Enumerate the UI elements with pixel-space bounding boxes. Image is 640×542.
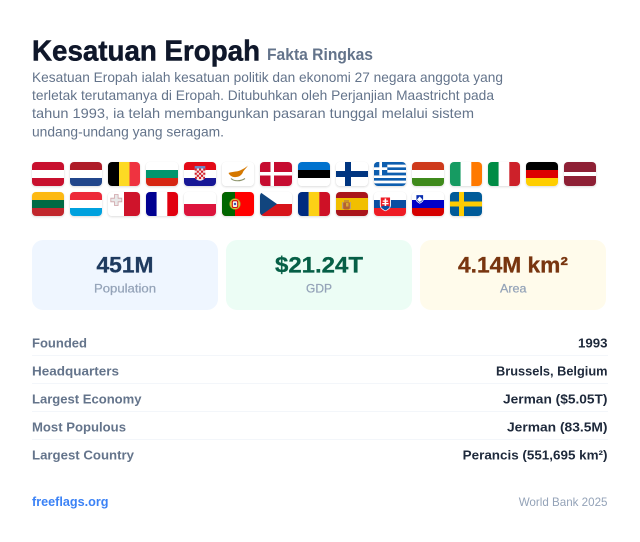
flag: Netherlands [68,162,104,188]
stat card: GDP: $21.24T [275,252,363,277]
flags grid [30,162,598,218]
row: headquarters [32,364,608,379]
description: undang-undang yang seragam. [32,124,224,139]
title: Kesatuan Eropah [32,36,260,68]
stat card: population: 451M [96,252,154,277]
flag: Latvia [562,162,598,188]
flag: Croatia [182,162,218,188]
flag: Malta [106,192,142,218]
flag: Spain [334,192,370,218]
row: headquarters: Headquarters [32,364,119,379]
flag: Estonia [296,162,332,188]
description: tahun 1993, ia telah membangunkan pasaran tunggal melalui sistem [32,106,474,121]
row: largest economy: Jerman ($5.05T) [503,392,608,407]
flag: Belgium [106,162,142,188]
flag: Hungary [410,162,446,188]
flag: Poland [183,194,217,218]
flag: Greece [372,162,408,188]
stat card: population: Population [94,281,156,295]
flag: Denmark [258,162,294,188]
description: Kesatuan Eropah ialah kesatuan politik dan ekonomi 27 negara anggota yang [32,70,503,85]
row: most populous: Jerman (83.5M) [507,420,608,435]
stat card: area: 4.14M km² [458,252,568,277]
row: founded [32,336,608,351]
row: largest country: Largest Country [32,448,135,463]
flag: France [144,192,180,218]
row: largest country: Perancis (551,695 km²) [463,448,608,463]
facts table [32,336,608,463]
flag: Bulgaria [145,164,179,188]
flag: Slovakia [373,194,407,218]
flag: Portugal [220,192,256,218]
row: largest economy: Largest Economy [32,392,142,407]
infographic page [31,39,608,508]
flag: Slovenia [411,194,445,218]
stat card: GDP: GDP [306,281,332,295]
row: most populous [32,420,608,435]
flag: Italy [486,162,522,188]
flag: Germany [524,162,560,188]
description [32,70,503,139]
flag: Czechia [259,192,293,218]
row: headquarters: Brussels, Belgium [496,364,608,379]
flag: Ireland [448,162,484,188]
flag: Luxembourg [68,192,104,218]
flag: Austria [30,162,66,188]
row: largest country [32,448,608,463]
stat card: area [420,240,606,310]
flag: Sweden [448,192,484,218]
flag: Finland [334,162,370,188]
description: terletak terutamanya di Eropah. Ditubuhkan oleh Perjanjian Maastricht pada [32,88,494,103]
flag: Lithuania [30,192,66,218]
stat card: area: Area [500,281,527,295]
row: most populous: Most Populous [32,420,126,435]
row: largest economy [32,392,608,407]
row: founded: 1993 [578,336,608,351]
flag: Romania [296,192,332,218]
row: founded: Founded [32,336,87,351]
footer source: World Bank 2025 [519,495,608,509]
subtitle: Fakta Ringkas [267,46,373,64]
flag: Cyprus [221,164,255,188]
stat card: GDP [226,240,412,310]
stat card: population [32,240,218,310]
footer link: freeflags.org [32,494,108,509]
